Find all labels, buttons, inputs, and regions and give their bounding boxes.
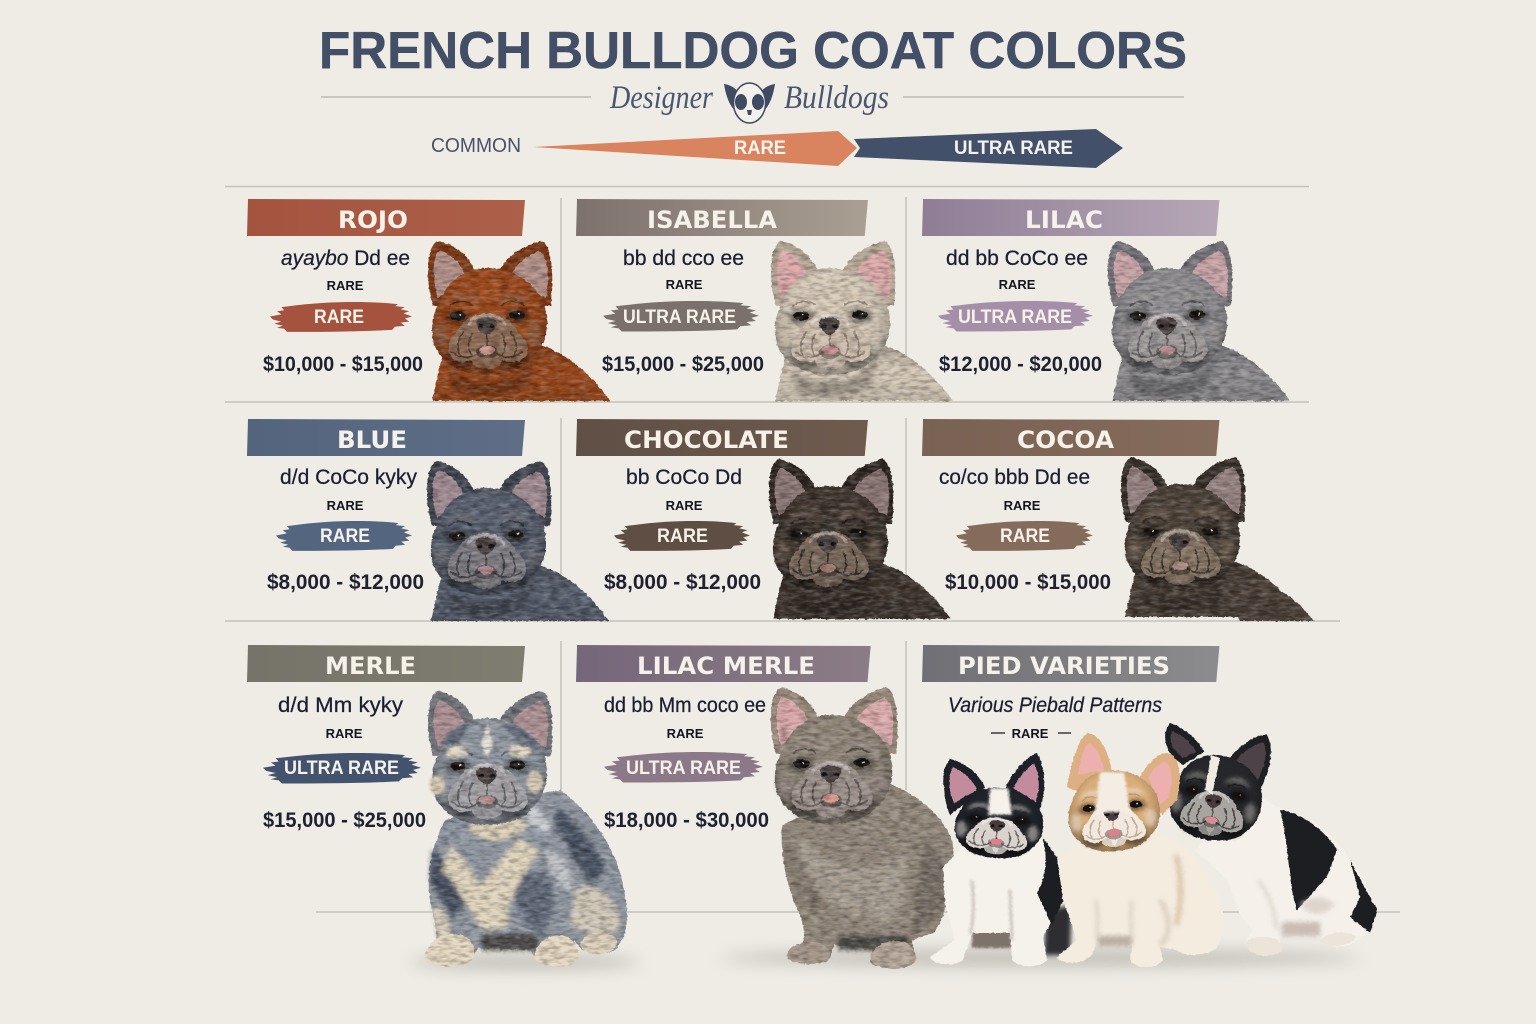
banner: chocolate: CHOCOLATE: [624, 426, 789, 454]
badge: rare: RARE: [314, 307, 364, 328]
rarity label: RARE: [666, 498, 703, 513]
rarity scale arrow: ULTRA RARE: [954, 138, 1073, 159]
rarity label: RARE: [667, 726, 704, 741]
banner: blue: BLUE: [337, 426, 407, 454]
panel: rojo: [247, 199, 610, 401]
dog: pied cream middle: [1057, 733, 1224, 967]
dog: chocolate: [769, 459, 951, 619]
badge: rare: RARE: [1000, 526, 1050, 547]
banner: chocolate: [576, 419, 868, 456]
brand logo: Designer Bulldogs: [321, 80, 1184, 123]
genotype: bb CoCo Dd: [626, 466, 742, 489]
pattern note: Various Piebald Patterns: [948, 694, 1162, 717]
price: $10,000 - $15,000: [263, 353, 423, 376]
genotype: dd bb CoCo ee: [946, 247, 1088, 270]
banner: pied varieties: [922, 645, 1219, 682]
genotype: ayaybo Dd ee: [281, 247, 410, 270]
banner: blue: [247, 419, 525, 456]
panel: lilac merle: [576, 645, 953, 969]
panel: cocoa: [922, 419, 1314, 621]
banner: lilac: [922, 199, 1219, 236]
rarity scale arrow: [431, 129, 1123, 168]
panel: merle: [247, 645, 627, 967]
dog: pied black and white left: [930, 753, 1063, 966]
badge: rare: RARE: [657, 526, 708, 547]
dog: merle: [425, 691, 627, 967]
brand logo: Designer Bulldogs: Designer: [609, 80, 713, 116]
price: $8,000 - $12,000: [267, 571, 424, 594]
genotype: d/d CoCo kyky: [280, 466, 417, 489]
genotype: dd bb Mm coco ee: [604, 694, 766, 717]
banner: isabella: ISABELLA: [647, 206, 777, 234]
dog: lilac: [1108, 241, 1290, 401]
banner: cocoa: COCOA: [1017, 426, 1114, 454]
badge: rare: [270, 302, 412, 332]
rarity label: RARE: [326, 726, 363, 741]
badge: rare: [614, 521, 750, 551]
dog: cocoa: [1121, 457, 1314, 621]
panel: blue: [247, 419, 609, 621]
price: $12,000 - $20,000: [939, 353, 1102, 376]
rarity label: RARE: [327, 278, 364, 293]
banner: isabella: [576, 199, 868, 236]
price: $18,000 - $30,000: [604, 809, 769, 832]
genotype: co/co bbb Dd ee: [939, 466, 1090, 489]
price: $15,000 - $25,000: [602, 353, 764, 376]
banner: lilac merle: [576, 645, 871, 682]
rarity label: [991, 726, 1071, 741]
rarity label: RARE: [327, 498, 364, 513]
banner: cocoa: [922, 419, 1219, 456]
banner: rojo: [247, 199, 525, 236]
title: FRENCH BULLDOG COAT COLORS: [319, 22, 1187, 80]
panel: chocolate: [576, 419, 951, 619]
genotype: d/d Mm kyky: [278, 694, 404, 717]
banner: lilac: LILAC: [1025, 206, 1103, 234]
panel: isabella: [576, 199, 953, 401]
price: $8,000 - $12,000: [604, 571, 761, 594]
price: $15,000 - $25,000: [263, 809, 426, 832]
badge: ultra rare: [263, 753, 421, 784]
ears: right dog: [1165, 723, 1271, 792]
rarity label: RARE: [1004, 498, 1041, 513]
badge: rare: [276, 521, 412, 551]
dog: blue: [427, 461, 609, 621]
dog: lilac merle: [771, 687, 953, 969]
banner: merle: MERLE: [325, 652, 416, 680]
badge: ultra rare: [604, 752, 763, 782]
badge: ultra rare: ULTRA RARE: [958, 307, 1072, 328]
panel: pied varieties: [922, 645, 1377, 967]
rarity label: RARE: [999, 277, 1036, 292]
badge: ultra rare: [938, 301, 1093, 332]
banner: merle: [247, 645, 525, 682]
banner: lilac merle: LILAC MERLE: [637, 652, 815, 680]
rarity scale arrow: RARE: [734, 138, 786, 159]
badge: ultra rare: [603, 301, 759, 332]
shadow between left and middle pied dogs: [1044, 905, 1072, 955]
badge: rare: [956, 521, 1093, 551]
rarity label: RARE: [1012, 726, 1049, 741]
badge: ultra rare: ULTRA RARE: [626, 758, 741, 779]
dog: pied black and white right: [1165, 723, 1377, 956]
badge: ultra rare: ULTRA RARE: [623, 307, 736, 328]
floor shadows: [410, 950, 1360, 969]
ears: left dog: [943, 753, 1044, 815]
rarity scale arrow: COMMON: [431, 135, 521, 157]
price: $10,000 - $15,000: [945, 571, 1111, 594]
rarity label: RARE: [666, 277, 703, 292]
icon: dog head logo: [724, 83, 775, 123]
badge: rare: RARE: [320, 526, 370, 547]
panel: lilac: [922, 199, 1290, 401]
genotype: bb dd cco ee: [623, 247, 744, 270]
badge: ultra rare: ULTRA RARE: [284, 758, 399, 779]
dog: isabella: [771, 241, 953, 401]
banner: rojo: ROJO: [338, 206, 408, 234]
dog: rojo: [428, 241, 610, 401]
banner: pied varieties: PIED VARIETIES: [958, 652, 1170, 680]
brand logo: Designer Bulldogs: Bulldogs: [784, 80, 889, 116]
